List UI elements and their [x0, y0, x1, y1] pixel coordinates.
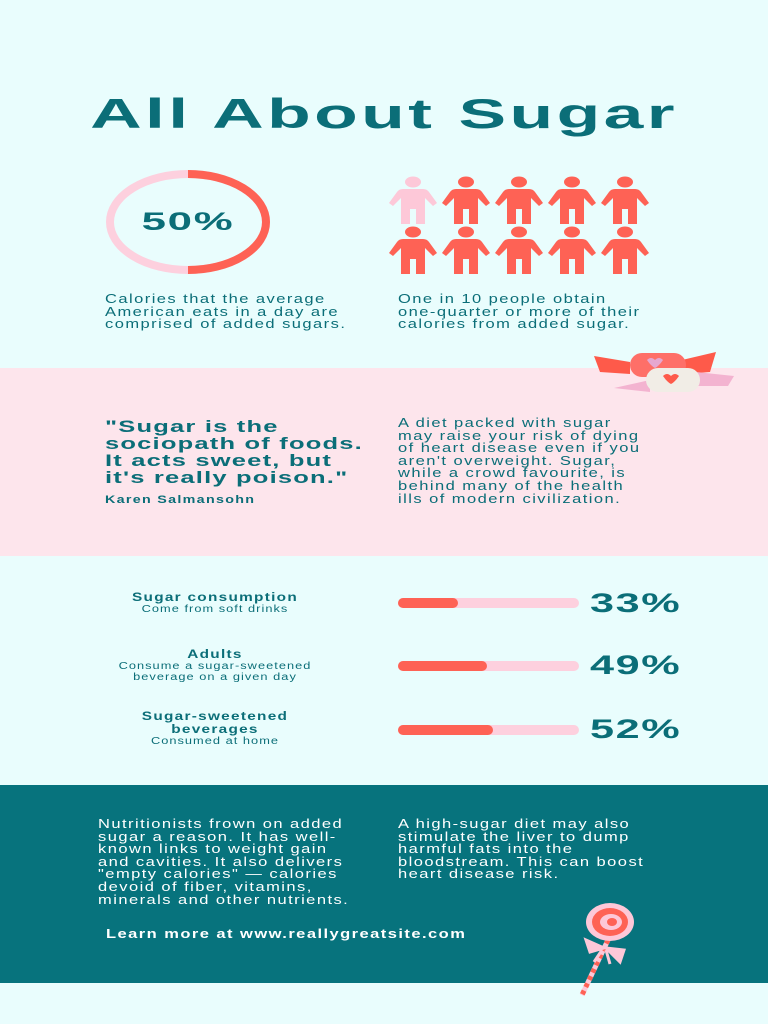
stat: adults — [119, 647, 311, 683]
text: nutritionists: Nutritionists frown on added — [98, 817, 343, 831]
stat: home: beverages — [171, 722, 259, 736]
text: nutritionists: and cavities. It also delivers — [98, 855, 343, 869]
stat: adults: Adults — [187, 647, 243, 661]
text: diet: A diet packed with sugar — [398, 416, 612, 430]
text: nutritionists: minerals and other nutrients. — [98, 893, 349, 907]
text: calories: Calories that the average — [105, 292, 326, 306]
donut chart 50% — [106, 170, 270, 274]
text: diet: may raise your risk of dying — [398, 429, 639, 443]
stat: home: Consumed at home — [151, 736, 279, 747]
stat: home — [142, 709, 288, 747]
text: diet: aren't overweight. Sugar, — [398, 454, 616, 468]
stat rows — [119, 588, 681, 747]
text: liver: stimulate the liver to dump — [398, 830, 630, 844]
donut chart 50%: 50% — [142, 208, 234, 236]
text: nutritionists — [98, 817, 349, 907]
text: nutritionists: "empty calories" — calories — [98, 867, 338, 881]
text: calories — [105, 292, 346, 331]
stat rows: 33% — [590, 588, 681, 618]
stat: soft drinks: Come from soft drinks — [142, 604, 288, 615]
icon: candies — [594, 352, 734, 392]
people icons — [389, 176, 649, 274]
text: diet: ills of modern civilization. — [398, 492, 621, 506]
text: liver: A high-sugar diet may also — [398, 817, 630, 831]
stat: adults: Consume a sugar-sweetened — [119, 661, 311, 672]
link: Learn more at www.reallygreatsite.com — [106, 927, 466, 941]
stat: soft drinks — [132, 590, 298, 615]
text: one in 10: one-quarter or more of their — [398, 305, 640, 319]
pink band — [0, 368, 768, 556]
text: liver — [398, 817, 644, 881]
text: liver: bloodstream. This can boost — [398, 855, 644, 869]
quote: "Sugar is the — [105, 417, 279, 436]
stat rows: 52% — [590, 714, 681, 744]
quote: it's really poison." — [105, 468, 348, 487]
text: one in 10 — [398, 292, 640, 331]
stat: soft drinks: Sugar consumption — [132, 590, 298, 604]
text: diet — [398, 416, 640, 506]
quote — [105, 417, 363, 487]
quote author: Karen Salmansohn — [105, 494, 255, 506]
stat rows: 49% — [590, 650, 681, 680]
text: diet: while a crowd favourite, is — [398, 466, 626, 480]
text: one in 10: One in 10 people obtain — [398, 292, 607, 306]
text: nutritionists: known links to weight gain — [98, 842, 327, 856]
text: calories: comprised of added sugars. — [105, 317, 346, 331]
title: All About Sugar — [90, 90, 678, 137]
text: diet: of heart disease even if you — [398, 441, 640, 455]
text: liver: harmful fats into the — [398, 842, 573, 856]
text: one in 10: calories from added sugar. — [398, 317, 630, 331]
quote: sociopath of foods. — [105, 434, 363, 453]
text: liver: heart disease risk. — [398, 867, 559, 881]
text: calories: American eats in a day are — [105, 305, 339, 319]
stat: home: Sugar-sweetened — [142, 709, 288, 723]
text: nutritionists: devoid of fiber, vitamins, — [98, 880, 313, 894]
text: diet: behind many of the health — [398, 479, 624, 493]
text: nutritionists: sugar a reason. It has well- — [98, 830, 337, 844]
teal band — [0, 785, 768, 983]
quote: It acts sweet, but — [105, 451, 332, 470]
stat: adults: beverage on a given day — [133, 672, 297, 683]
icon: lollipop — [580, 903, 634, 996]
